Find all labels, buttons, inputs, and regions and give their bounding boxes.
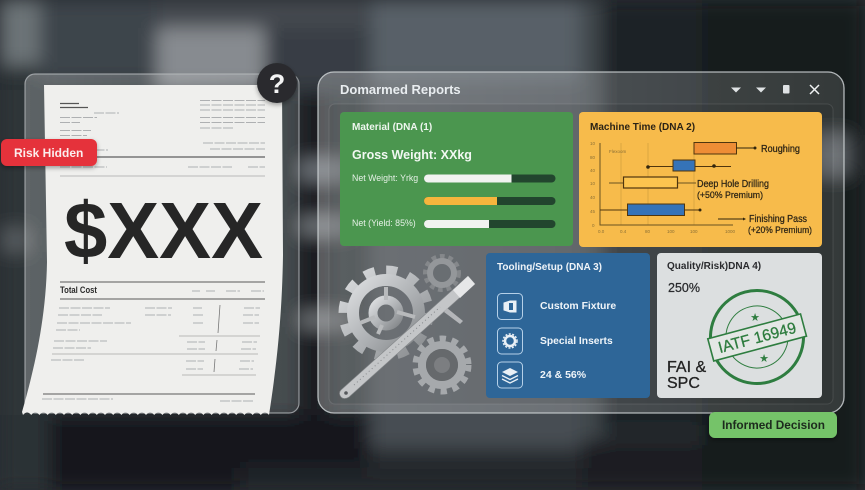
- icon: fixture: [498, 294, 522, 320]
- gear: lower: [416, 339, 468, 391]
- finishing pass: [718, 218, 744, 220]
- glass panel left: [25, 74, 299, 413]
- gantt box chart: [590, 141, 812, 236]
- gantt box chart: 45: [590, 209, 596, 214]
- box: roughing: [694, 142, 736, 154]
- card: material: [340, 112, 573, 246]
- icon: gears and ruler: [340, 256, 475, 398]
- glass window: [318, 72, 844, 413]
- card: quality: FAI &: [667, 359, 706, 376]
- inner frame: [329, 104, 833, 404]
- gantt box chart: 100: [690, 229, 698, 234]
- gantt box chart: Flexoom: [609, 149, 627, 154]
- gantt box chart: (+20% Premium): [748, 225, 812, 236]
- card: material: Net (Yield: 85%): [352, 218, 416, 228]
- gantt box chart: (+50% Premium): [697, 190, 763, 201]
- stamp: IATF 16949: IATF 16949: [717, 320, 798, 357]
- gantt box chart: 10: [590, 181, 596, 186]
- gantt box chart: 100: [667, 229, 675, 234]
- price: $XXX: [64, 186, 263, 275]
- icon: layers: [498, 362, 522, 388]
- card: machine time: Machine Time (DNA 2): [590, 122, 695, 133]
- badge: informed decision: [709, 412, 837, 438]
- gantt box chart: 10: [590, 141, 596, 146]
- gear: small: [426, 256, 458, 290]
- badge: risk hidden: Risk Hidden: [14, 146, 83, 160]
- card: tooling: Custom Fixture: [540, 301, 616, 312]
- stamp stars: ★: [759, 353, 769, 365]
- badge: question mark: ?: [269, 69, 285, 99]
- card: quality: 250%: [668, 281, 700, 295]
- card: quality: SPC: [667, 375, 700, 392]
- stamp stars: ★: [750, 312, 760, 324]
- gantt box chart: 40: [590, 195, 596, 200]
- card: machine time: [579, 112, 822, 247]
- gantt box chart: Deep Hole Drilling: [697, 179, 769, 190]
- gantt box chart: Finishing Pass: [749, 214, 807, 225]
- card: quality: Quality/Risk)DNA 4): [667, 261, 761, 272]
- card: material: Net Weight: Yrkg: [352, 173, 418, 183]
- card: material: Material (DNA (1): [352, 122, 432, 133]
- badge: question mark: [257, 63, 297, 103]
- badge: informed decision: Informed Decision: [722, 418, 825, 432]
- box: lower blue: [600, 209, 700, 211]
- progress bars: [424, 174, 556, 228]
- window title: Domarmed Reports: [340, 82, 461, 97]
- gantt box chart: Roughing: [761, 144, 800, 155]
- card: tooling: [486, 253, 650, 398]
- stamp stars: [750, 312, 769, 365]
- gantt box chart: 1000: [725, 229, 736, 234]
- gantt box chart: 0.0: [598, 229, 605, 234]
- gantt box chart: 40: [590, 168, 596, 173]
- foreground content: [1, 63, 844, 438]
- panel: reports window: [318, 72, 844, 413]
- card: material: Gross Weight: XXkg: [352, 148, 472, 162]
- gantt box chart: 0.4: [620, 229, 627, 234]
- gear: large: [343, 270, 429, 356]
- gantt box chart: 0: [592, 223, 595, 228]
- card: tooling: 24 & 56%: [540, 369, 587, 381]
- card: quality: [657, 253, 822, 398]
- window controls: [731, 85, 819, 94]
- panel: cost receipt: [22, 74, 299, 415]
- total cost label: Total Cost: [60, 285, 97, 295]
- card: tooling: Tooling/Setup (DNA 3): [497, 262, 602, 273]
- ruler: [340, 276, 475, 398]
- box: deep hole drilling: [609, 182, 696, 184]
- gantt box chart: 80: [645, 229, 651, 234]
- badge: risk hidden: [1, 139, 97, 166]
- box: mid blue: [648, 166, 731, 168]
- icon: insert: [498, 328, 522, 354]
- card: tooling: Special Inserts: [540, 336, 613, 347]
- receipt paper: [22, 85, 283, 415]
- gantt box chart: 80: [590, 155, 596, 160]
- stamp: IATF 16949: [699, 280, 815, 394]
